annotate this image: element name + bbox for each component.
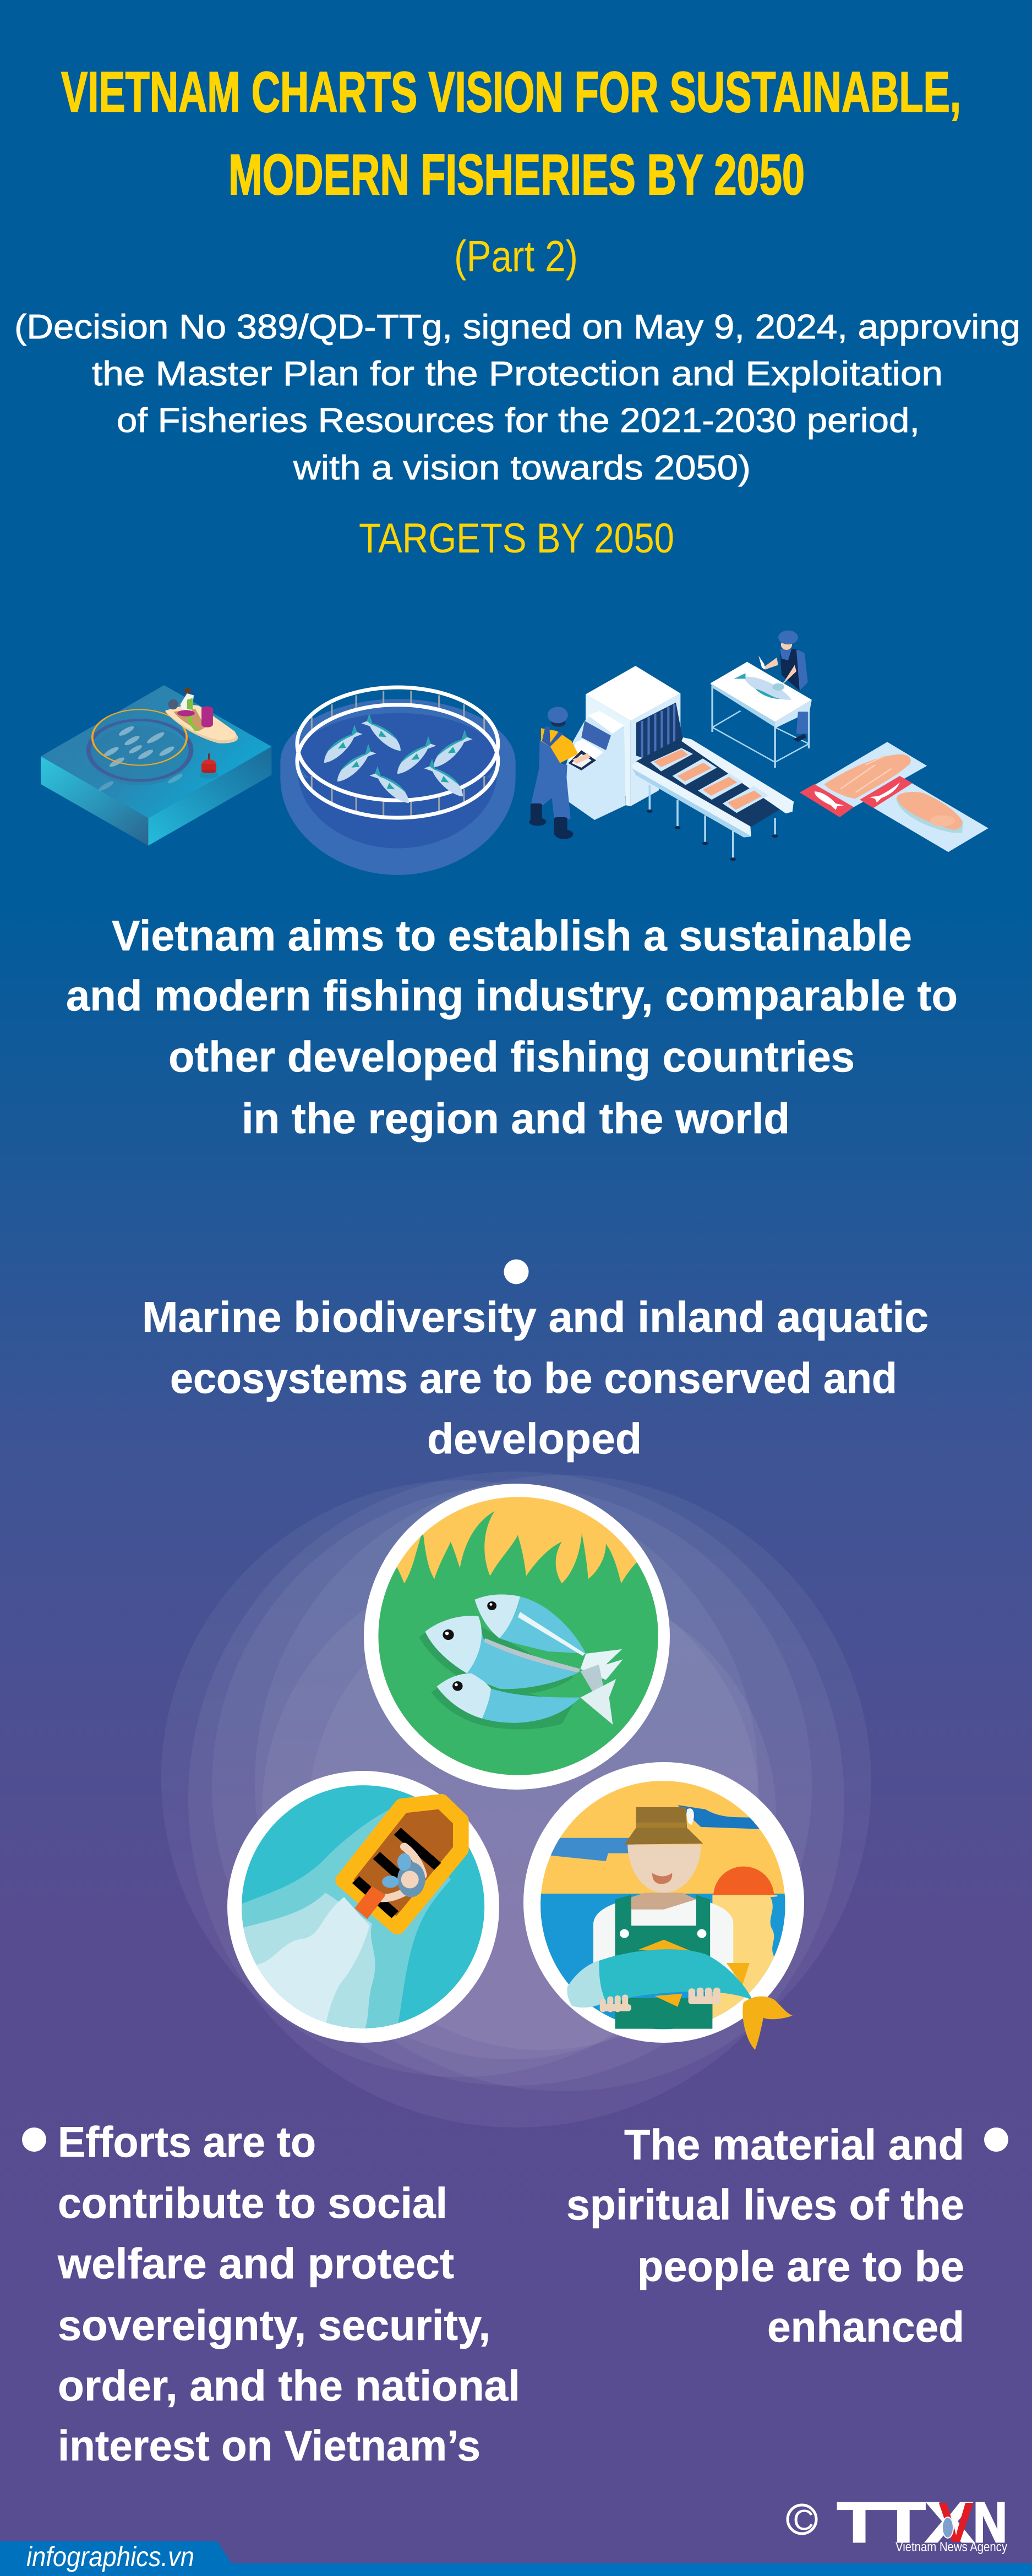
text: efforts for social welfare and sovereignty: welfare and protect <box>57 2239 454 2288</box>
text: marine biodiversity: ecosystems are to be conserved and <box>170 1354 897 1402</box>
logo: TTXVN: Vietnam News Agency <box>896 2540 1007 2555</box>
illustration: aquaculture sea cage <box>41 685 516 875</box>
scanner machine <box>586 666 683 806</box>
icon: inflatable boat on water <box>227 1771 499 2043</box>
boat <box>343 1802 461 1927</box>
title <box>61 61 961 207</box>
text: efforts for social welfare and sovereignty: Efforts are to <box>58 2118 316 2166</box>
logo: TTXVN: N <box>973 2491 1007 2554</box>
icon: fish in seagrass <box>364 1484 673 1792</box>
bullet: social welfare <box>22 2127 46 2152</box>
text: efforts for social welfare and sovereignty: interest on Vietnam’s <box>58 2421 480 2470</box>
text: marine biodiversity <box>142 1293 929 1463</box>
bullet: biodiversity <box>504 1259 528 1284</box>
text: efforts for social welfare and sovereignty: sovereignty, security, <box>58 2301 490 2349</box>
conveyor belt with trays <box>632 737 794 838</box>
decision reference text: (Decision No 389/QD-TTg, signed on May 9, 2024, approving <box>14 308 1020 346</box>
concentric halo circles <box>161 1472 871 2127</box>
decision reference text: of Fisheries Resources for the 2021-2030 period, <box>117 402 920 440</box>
worker at console <box>529 707 590 839</box>
three fish <box>419 1594 623 1730</box>
mission statement: other developed fishing countries <box>168 1032 855 1081</box>
copyright mark: C <box>793 2504 814 2536</box>
text: material and spiritual lives: The material and <box>624 2120 964 2169</box>
mission statement <box>66 911 958 1142</box>
illustration: seafood processing line <box>529 631 989 861</box>
fish in tank <box>319 714 473 807</box>
decision reference text <box>14 308 1020 487</box>
control console <box>565 711 626 820</box>
net cage with fish <box>89 709 191 792</box>
text: material and spiritual lives: enhanced <box>767 2302 964 2351</box>
icon: fisherman holding fish <box>523 1762 804 2050</box>
conveyor legs <box>647 785 778 861</box>
buoy <box>199 753 219 779</box>
text: marine biodiversity: developed <box>427 1414 642 1463</box>
sea block <box>41 685 271 846</box>
text: material and spiritual lives <box>566 2120 964 2351</box>
text: efforts for social welfare and sovereignty: contribute to social <box>58 2179 447 2227</box>
text: efforts for social welfare and sovereignty: order, and the national <box>58 2361 520 2410</box>
fisherman <box>593 1807 733 2029</box>
circular fish tank <box>280 687 516 875</box>
text: marine biodiversity: Marine biodiversity and inland aquatic <box>142 1293 929 1341</box>
text: material and spiritual lives: spiritual lives of the <box>566 2180 964 2229</box>
text: material and spiritual lives: people are to be <box>637 2242 964 2290</box>
fish held by fisherman <box>567 1940 793 2050</box>
decision reference text: with a vision towards 2050) <box>293 449 751 487</box>
boat with fisherman <box>165 688 238 743</box>
footer bar <box>0 2541 1032 2576</box>
logo: TTXVN: V <box>938 2491 974 2554</box>
salmon packages <box>800 742 989 852</box>
footer source: infographics.vn: infographics.vn <box>26 2541 194 2572</box>
logo: TTXVN <box>837 2491 1007 2555</box>
cutting table <box>711 662 812 768</box>
mission statement: and modern fishing industry, comparable to <box>66 971 958 1020</box>
mission statement: in the region and the world <box>242 1094 790 1142</box>
subtitle: part 2: (Part 2) <box>454 232 578 281</box>
worker cutting fish <box>758 631 808 742</box>
mission statement: Vietnam aims to establish a sustainable <box>112 911 912 960</box>
decision reference text: the Master Plan for the Protection and Exploitation <box>92 355 943 393</box>
logo: TTXVN: TTX <box>837 2491 974 2554</box>
fish on table <box>734 673 791 700</box>
bullet: livelihoods <box>984 2127 1008 2152</box>
heading: targets by 2050: TARGETS BY 2050 <box>359 515 674 562</box>
text: efforts for social welfare and sovereignty <box>57 2118 520 2470</box>
title: MODERN FISHERIES BY 2050 <box>228 143 805 207</box>
